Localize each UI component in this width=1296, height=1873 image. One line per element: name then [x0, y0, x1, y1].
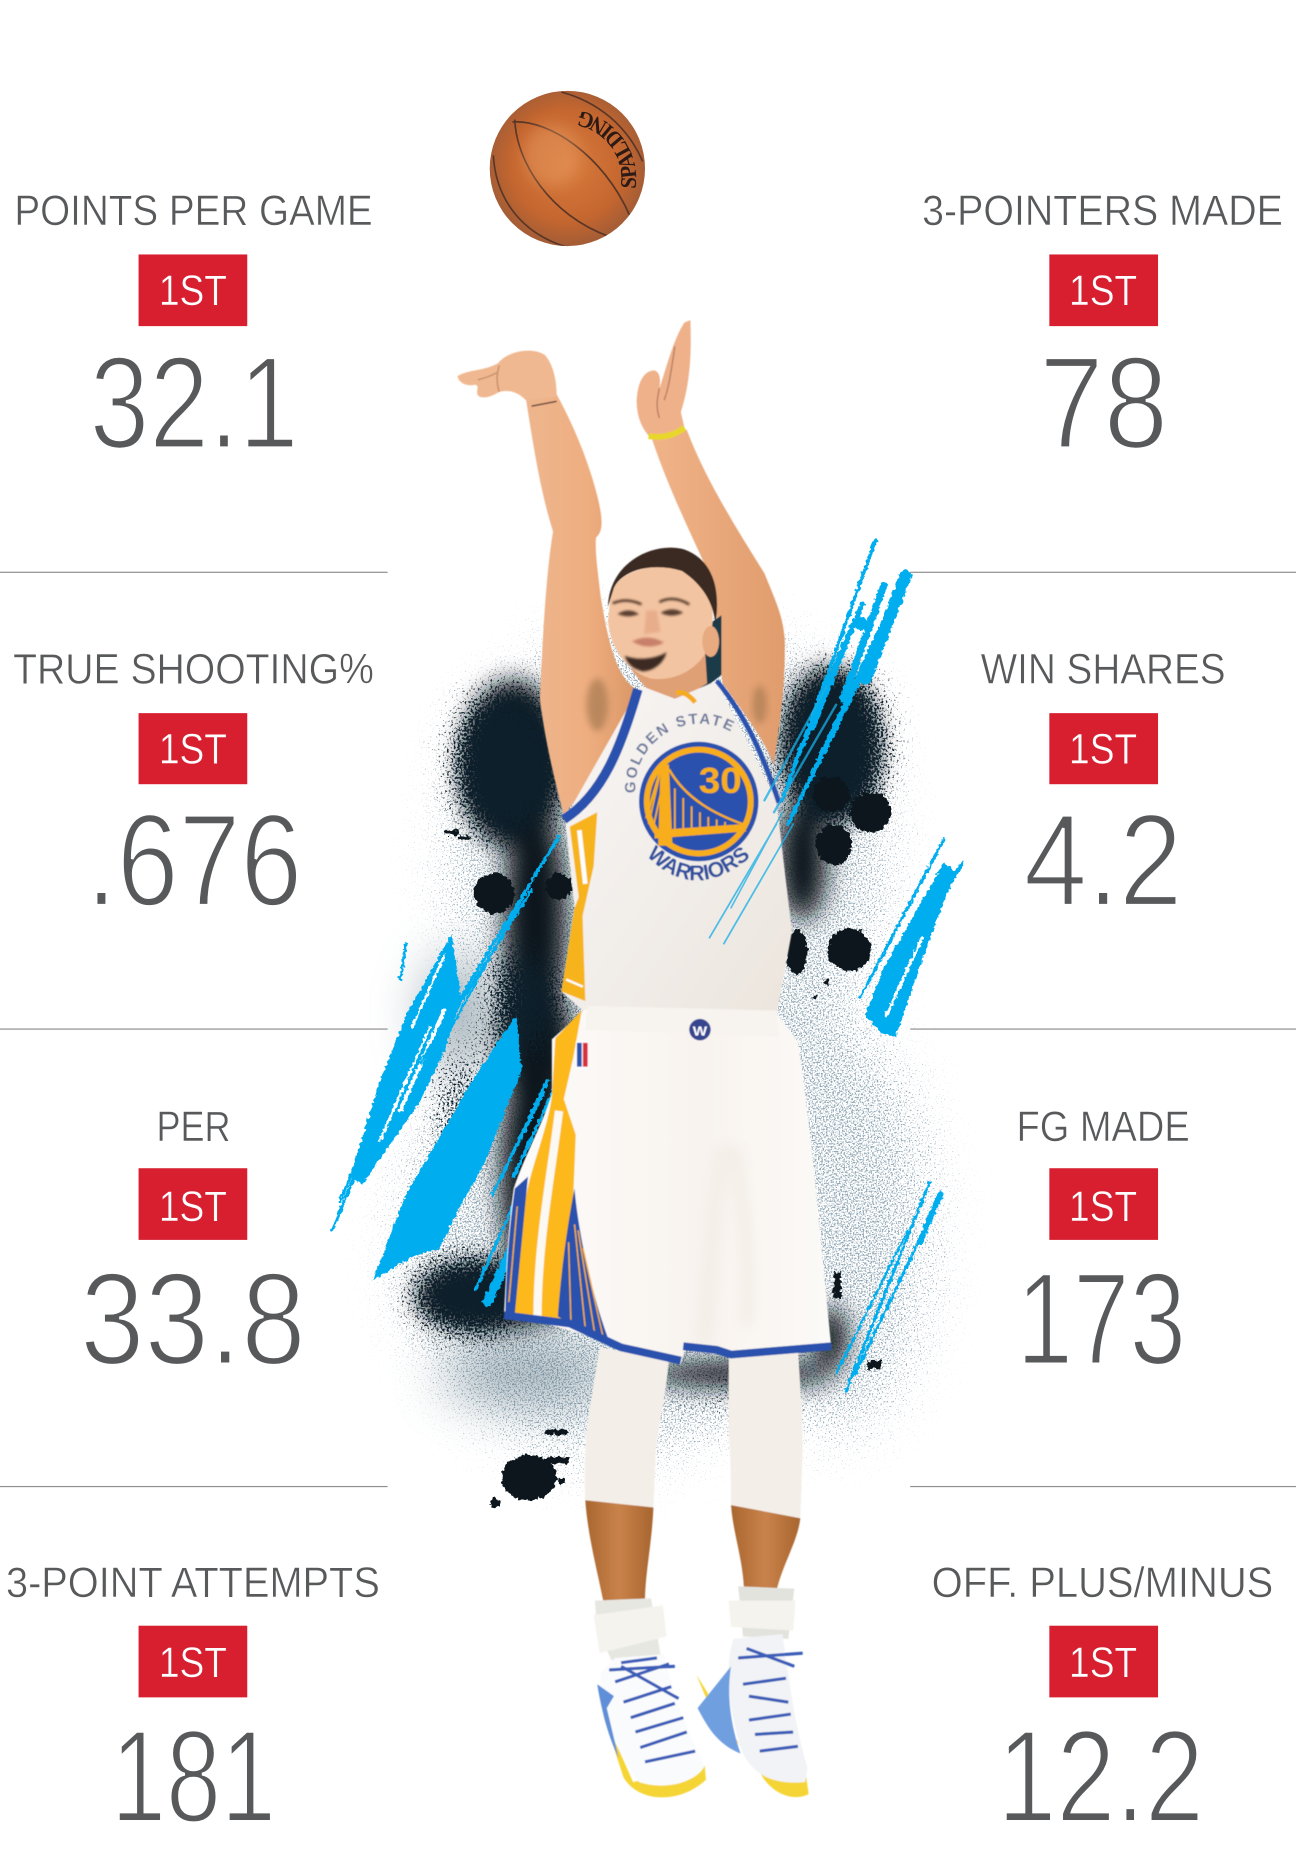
- goatee: [625, 652, 667, 671]
- panel: 3-point attempts: [6, 1559, 380, 1850]
- rank badge: 1ST: [1069, 1639, 1137, 1686]
- rank badge: 1ST: [1069, 267, 1137, 314]
- panel: FG made: [1016, 1103, 1190, 1392]
- rank badge: [139, 1626, 247, 1697]
- panel: true shooting: [13, 645, 374, 933]
- rank badge: [139, 713, 247, 784]
- spray: grainy ink edges: [412, 669, 879, 1399]
- value: .676: [86, 786, 302, 933]
- illustration: blue brush strokes over jersey: [710, 687, 836, 944]
- label: TRUE SHOOTING%: [13, 645, 374, 692]
- value: 181: [111, 1703, 276, 1850]
- rank badge: [1049, 1168, 1158, 1240]
- panel: win shares: [981, 645, 1226, 933]
- brush: right middle streak: [865, 862, 956, 1037]
- league logo: [576, 1040, 589, 1069]
- value: 173: [1016, 1245, 1186, 1392]
- label: PER: [156, 1103, 231, 1150]
- rank badge: 1ST: [159, 1183, 227, 1230]
- player: compression tights: [585, 1347, 803, 1518]
- label: FG MADE: [1016, 1103, 1190, 1150]
- illustration: spray paint background: [394, 609, 938, 1507]
- hair: [608, 548, 717, 624]
- player: shorts: [504, 1006, 831, 1364]
- rank badge: 1ST: [159, 725, 227, 772]
- brush: left bristle mass: [350, 934, 461, 1185]
- nose and mouth: [644, 610, 661, 634]
- laces: [738, 1648, 803, 1751]
- waist badge: [689, 1019, 711, 1040]
- label: OFF. PLUS/MINUS: [932, 1559, 1273, 1606]
- wristband: [649, 428, 684, 437]
- rank badge: 1ST: [1069, 725, 1137, 772]
- player: right shoe: [696, 1586, 809, 1797]
- value: 33.8: [80, 1245, 306, 1392]
- ball brand text: SPALDING: [578, 112, 636, 188]
- rank badge: [1049, 713, 1158, 784]
- jersey side panel: [570, 812, 597, 920]
- hand: left: [457, 351, 557, 400]
- value: 32.1: [90, 329, 299, 476]
- spray: ink splats: [444, 776, 891, 1507]
- shorts hem: [504, 1315, 831, 1361]
- panel: PER: [80, 1103, 306, 1392]
- ball highlight: [523, 124, 581, 186]
- player: left shoe: [594, 1598, 706, 1797]
- spray: light grain halo: [394, 609, 938, 1469]
- spray: soft dark clouds: [418, 669, 876, 1386]
- label: POINTS PER GAME: [14, 187, 373, 234]
- rank badge: 1ST: [159, 267, 227, 314]
- value: 78: [1039, 329, 1168, 476]
- shorts side stripe: [514, 1011, 582, 1321]
- spray: grey wash lower left: [424, 956, 609, 1404]
- panel: off. plus/minus: [932, 1559, 1273, 1850]
- shorts folds: [705, 1147, 748, 1344]
- value: 12.2: [997, 1703, 1204, 1850]
- player: left arm: [457, 351, 767, 815]
- player: right arm: [637, 320, 785, 764]
- logo: player number: 30: [699, 761, 742, 801]
- rank badge: [139, 1168, 247, 1240]
- panel: 3-pointers made: [922, 187, 1283, 476]
- logo: bridge: [646, 764, 747, 846]
- ear: [702, 626, 719, 657]
- brush: top right bristle group: [782, 540, 905, 824]
- player: head: [608, 548, 721, 705]
- player: jersey: [560, 678, 792, 1012]
- rank badge: 1ST: [1069, 1183, 1137, 1230]
- team logo: [639, 742, 758, 861]
- player: shins: [585, 1500, 800, 1601]
- value: 4.2: [1024, 786, 1183, 933]
- rank badge: [1049, 254, 1158, 326]
- laces: [609, 1658, 695, 1762]
- divider lines: [0, 572, 1296, 1487]
- illustration: blue brush strokes behind player: [332, 540, 963, 1392]
- rank badge: [1049, 1626, 1158, 1697]
- panel: points per game: [14, 187, 373, 476]
- jersey trim: [564, 681, 779, 819]
- ball seams: [493, 92, 643, 247]
- label: 3-POINT ATTEMPTS: [6, 1559, 380, 1606]
- illustration: basketball: [490, 90, 645, 246]
- brush: large solid swash: [373, 1015, 522, 1281]
- brush: right lower streak: [836, 1183, 941, 1392]
- armpit hair: [586, 678, 608, 731]
- rank badge: [139, 254, 247, 326]
- illustration: player: [457, 320, 832, 1798]
- tattoo: [532, 401, 557, 406]
- eyes: [613, 599, 689, 671]
- hand: right: [637, 320, 691, 440]
- waist badge: W: [693, 1024, 708, 1039]
- ball body: [490, 91, 645, 246]
- jersey lettering: GOLDEN STATE: GOLDEN STATE: [624, 713, 735, 793]
- jersey lettering: WARRIORS: WARRIORS: [648, 844, 749, 881]
- brush: left bristle group: [332, 836, 559, 1302]
- rank badge: 1ST: [159, 1639, 227, 1686]
- label: WIN SHARES: [981, 645, 1226, 692]
- waistband: [585, 1006, 779, 1037]
